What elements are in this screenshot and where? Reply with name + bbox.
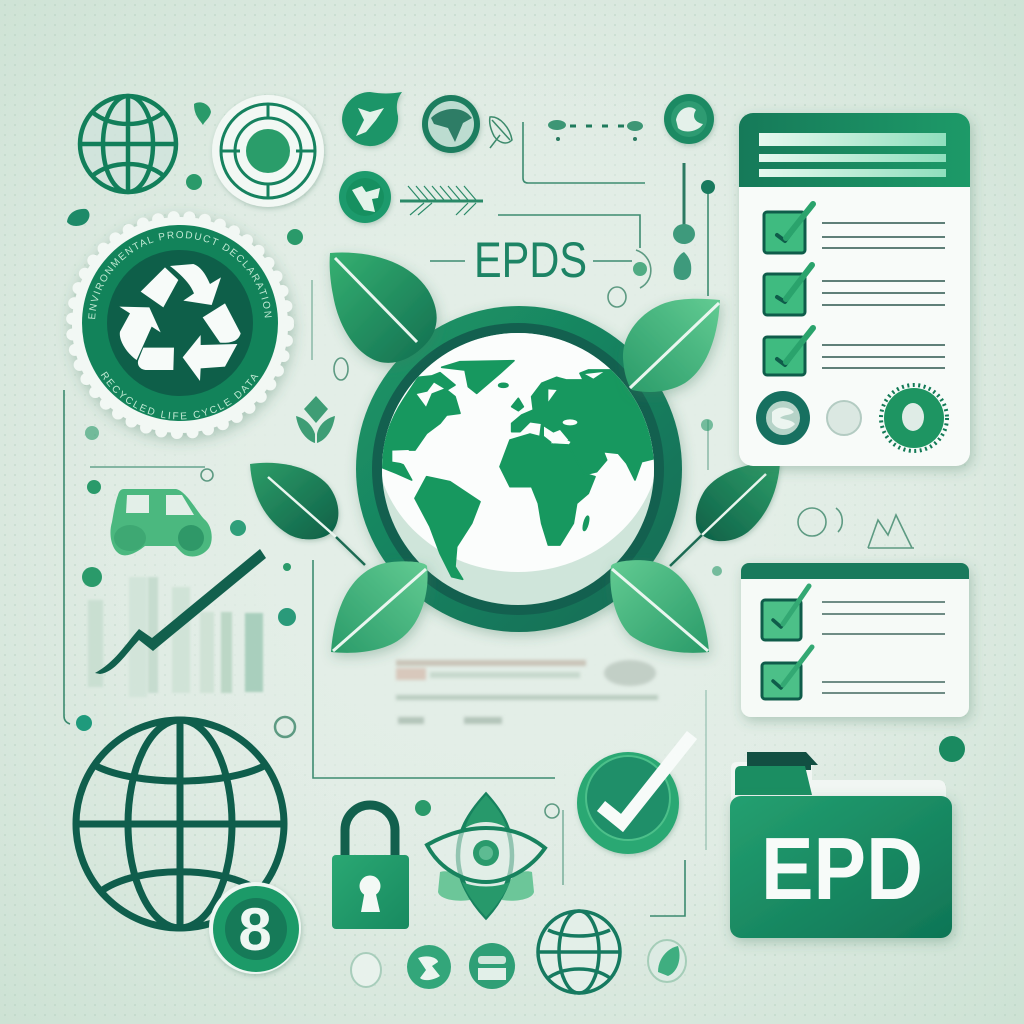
dashed link	[548, 120, 643, 141]
icon: fan badge	[664, 94, 714, 144]
icon: butterfly leaf	[490, 117, 512, 148]
heading: EPDS: EPDS	[474, 232, 587, 288]
connector lines	[64, 122, 708, 916]
folder label: EPD	[761, 819, 923, 918]
badge one	[407, 945, 451, 989]
chart: rising line with bars	[88, 549, 266, 697]
bottom small badges	[351, 943, 515, 989]
icon: leaf badge top	[342, 92, 402, 146]
globe sphere highlight	[382, 333, 654, 572]
seal dark centre	[107, 250, 253, 396]
icon: car	[110, 489, 212, 557]
card icons	[756, 385, 947, 451]
icon: layered leaves	[296, 396, 335, 443]
central globe	[356, 306, 682, 632]
icon: small wireframe globe	[80, 96, 176, 192]
icon: small leaf vase	[648, 940, 686, 982]
card body	[739, 113, 970, 466]
icon: numbered medallion	[209, 882, 301, 974]
icon: padlock	[332, 805, 409, 929]
recycling seal badge	[63, 210, 302, 448]
globe sphere	[382, 333, 654, 605]
icon: numbered medallion: 8	[238, 896, 272, 963]
leaf: top left	[330, 253, 437, 363]
seal ring text: ENVIRONMENTAL PRODUCT DECLARATION	[88, 231, 272, 319]
folder tab front	[735, 766, 812, 795]
icon: feather arrow	[400, 186, 483, 215]
folder: EPD	[730, 752, 952, 938]
card header	[741, 563, 969, 579]
header bars	[759, 133, 946, 177]
folder body	[730, 796, 952, 938]
globe inner dark ring	[372, 323, 664, 615]
card body	[741, 563, 969, 717]
chart bars	[88, 577, 263, 697]
small outline icons	[201, 250, 914, 818]
icon: recycling arrows	[119, 264, 241, 381]
seal ring text lower: RECYCLED LIFE CYCLE DATA	[100, 372, 258, 420]
badge outline	[351, 953, 381, 987]
icon: target seal	[212, 95, 324, 207]
globe white cut-outs	[392, 372, 603, 477]
leaf: bottom left	[331, 561, 428, 653]
blurred text block	[396, 660, 658, 724]
badge two	[469, 943, 515, 989]
card header	[739, 113, 970, 187]
icon: lower wireframe globe	[538, 911, 620, 993]
chart trend arrow	[95, 549, 266, 674]
icon: eye emblem	[427, 795, 545, 917]
leaf: middle right	[670, 462, 780, 566]
checklist card: small	[741, 563, 969, 717]
text lines	[822, 223, 945, 368]
leaf: bottom right	[610, 560, 709, 653]
folder tab	[747, 752, 818, 770]
checklist card: large	[739, 113, 970, 466]
leaf: middle left	[250, 463, 365, 565]
seal green ring	[82, 225, 278, 421]
leaf: top right	[623, 299, 720, 392]
icon: leaf badge second	[339, 171, 391, 223]
globe continents	[380, 361, 655, 579]
checkboxes	[762, 586, 812, 699]
text lines	[822, 602, 945, 693]
icon: large wireframe globe	[76, 720, 284, 928]
checkboxes	[764, 204, 813, 375]
globe outer ring	[356, 306, 682, 632]
seal scalloped edge	[72, 217, 288, 433]
small decorative icons	[64, 102, 965, 816]
icon: tool pin	[673, 163, 695, 280]
icon: earth badge	[422, 95, 480, 153]
folder back	[731, 762, 946, 800]
icon: check circle	[577, 735, 692, 854]
